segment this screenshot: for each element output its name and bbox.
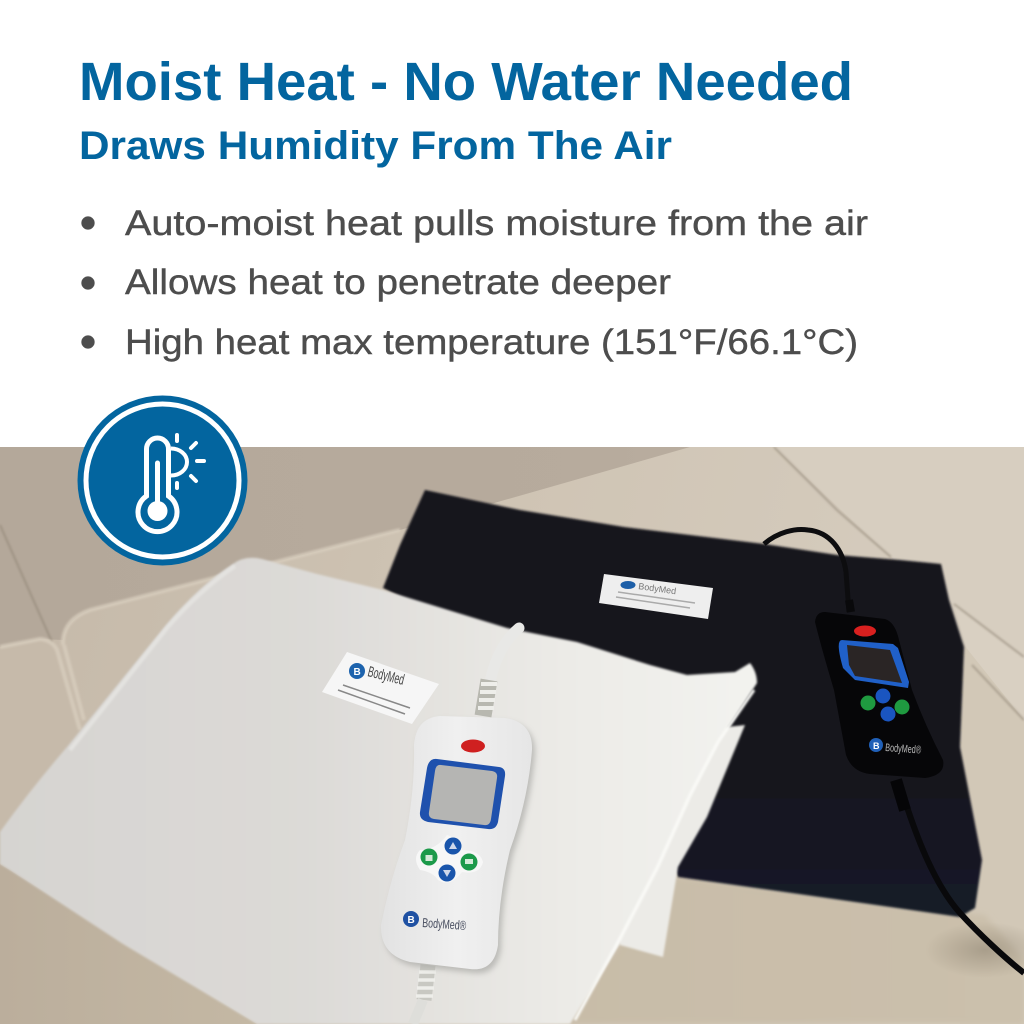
remote logo: BodyMed® — [422, 915, 467, 933]
remote logo — [403, 911, 467, 933]
label on black pad — [599, 574, 713, 619]
bullet: auto-moist: Auto-moist heat pulls moisture from the air — [125, 204, 868, 243]
icon: thermometer and sun badge — [78, 396, 248, 566]
screen — [839, 640, 909, 688]
photo: sofa background — [0, 447, 1024, 1024]
photo: black heating pad — [383, 490, 982, 917]
power button — [461, 740, 485, 752]
title: Moist Heat - No Water Needed — [79, 52, 853, 112]
button pad — [416, 835, 483, 883]
label on white pad: B — [354, 667, 361, 678]
photo: white heating pad — [0, 558, 757, 1024]
cable of black remote — [764, 530, 849, 612]
remote logo — [869, 738, 922, 757]
buttons — [876, 688, 890, 704]
bullet list — [82, 204, 868, 362]
remote logo: BodyMed® — [885, 742, 922, 757]
thermometer — [138, 438, 177, 532]
sun — [171, 448, 187, 476]
photo: white remote — [381, 716, 535, 973]
power button — [854, 626, 876, 636]
bullet: penetrate deeper: Allows heat to penetrate deeper — [125, 263, 671, 302]
under flap — [620, 724, 746, 958]
buttons — [444, 838, 462, 854]
subtitle: Draws Humidity From The Air — [79, 124, 672, 168]
photo: white cable — [413, 628, 519, 1024]
sofa seams — [0, 447, 1024, 720]
screen — [420, 759, 505, 829]
remote logo: B — [408, 915, 415, 926]
photo: black remote — [815, 600, 1024, 973]
label on white pad: BodyMed — [366, 663, 406, 689]
label on black pad: BodyMed — [638, 581, 677, 596]
remote logo: B — [873, 741, 880, 751]
label on white pad — [322, 652, 439, 724]
bullet: max temperature: High heat max temperature (151°F/66.1°C) — [125, 323, 858, 362]
